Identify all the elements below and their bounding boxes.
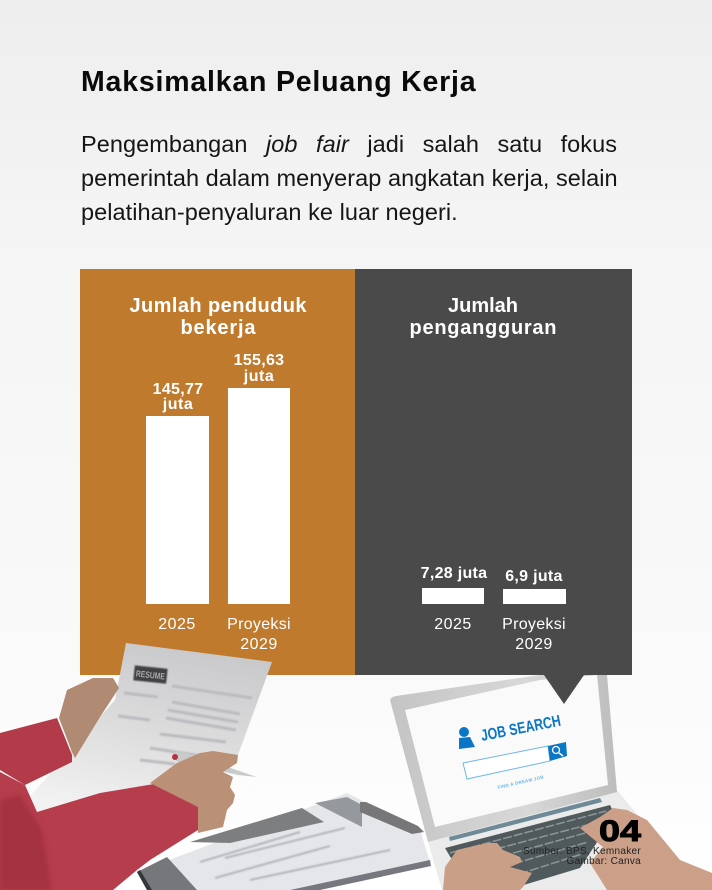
bar chart: employed: 145,77	[153, 381, 203, 398]
bar chart: unemployed	[421, 565, 566, 653]
panel: unemployed population	[355, 269, 632, 675]
search box	[463, 742, 567, 779]
source credit	[523, 846, 641, 867]
page number: 04	[599, 815, 641, 848]
heading: employed: Jumlah penduduk	[130, 295, 307, 317]
left typing hand	[443, 843, 532, 890]
bar chart: unemployed: 6,9 juta	[505, 568, 563, 585]
title: Maksimalkan Peluang Kerja	[81, 66, 476, 98]
resume paper	[25, 643, 272, 812]
resume label: RESUME	[135, 669, 165, 682]
hinge	[449, 798, 602, 841]
bar chart: unemployed: 2029	[515, 636, 553, 653]
panel: employed population	[80, 269, 355, 675]
callout pointer	[544, 675, 584, 704]
intro text block	[81, 131, 618, 225]
left hand	[59, 678, 119, 758]
bar chart: employed: juta	[162, 396, 193, 413]
bar chart: unemployed: 7,28 juta	[421, 565, 487, 582]
heading: unemployed	[410, 295, 556, 339]
laptop body	[428, 790, 660, 890]
clipboard with resume	[137, 793, 431, 890]
bar chart: employed: 2029	[240, 636, 278, 653]
resume label	[133, 665, 168, 684]
bar chart: unemployed: 2025	[434, 616, 472, 633]
pen	[172, 750, 257, 777]
heading: unemployed: Jumlah	[448, 295, 518, 317]
laptop lid	[390, 675, 617, 842]
intro text block: pemerintah dalam menyerap angkatan kerja, selain	[81, 165, 618, 191]
job search logo: JOB SEARCH	[480, 713, 562, 745]
find a dream job: FIND A DREAM JOB	[497, 774, 545, 790]
bar chart: employed: 155,63	[234, 352, 284, 369]
heading: employed: bekerja	[180, 317, 256, 339]
source credit: Sumber: BPS, Kemnaker	[523, 846, 641, 857]
laptop screen	[405, 675, 608, 827]
photo: laptop with job search	[360, 675, 712, 890]
bar chart: unemployed: Proyeksi	[502, 616, 566, 633]
bar chart: employed: Proyeksi	[227, 616, 291, 633]
bar chart: employed: juta	[243, 368, 274, 385]
intro text block: pelatihan-penyaluran ke luar negeri.	[81, 199, 458, 225]
job search logo	[459, 713, 562, 749]
left arm	[0, 718, 72, 785]
bar chart: employed	[146, 352, 291, 653]
clipboard clip	[360, 802, 424, 834]
right hand	[150, 751, 238, 833]
photo: hands holding resume	[0, 643, 431, 890]
source credit: Gambar: Canva	[566, 856, 641, 867]
right arm	[0, 772, 198, 890]
heading: unemployed: pengangguran	[410, 317, 556, 339]
intro text block: Pengembangan job fair jadi salah satu fokus	[81, 131, 617, 157]
right typing hand	[580, 808, 712, 890]
keyboard	[445, 805, 615, 890]
heading: employed	[130, 295, 307, 339]
bar chart: employed: 2025	[158, 616, 196, 633]
